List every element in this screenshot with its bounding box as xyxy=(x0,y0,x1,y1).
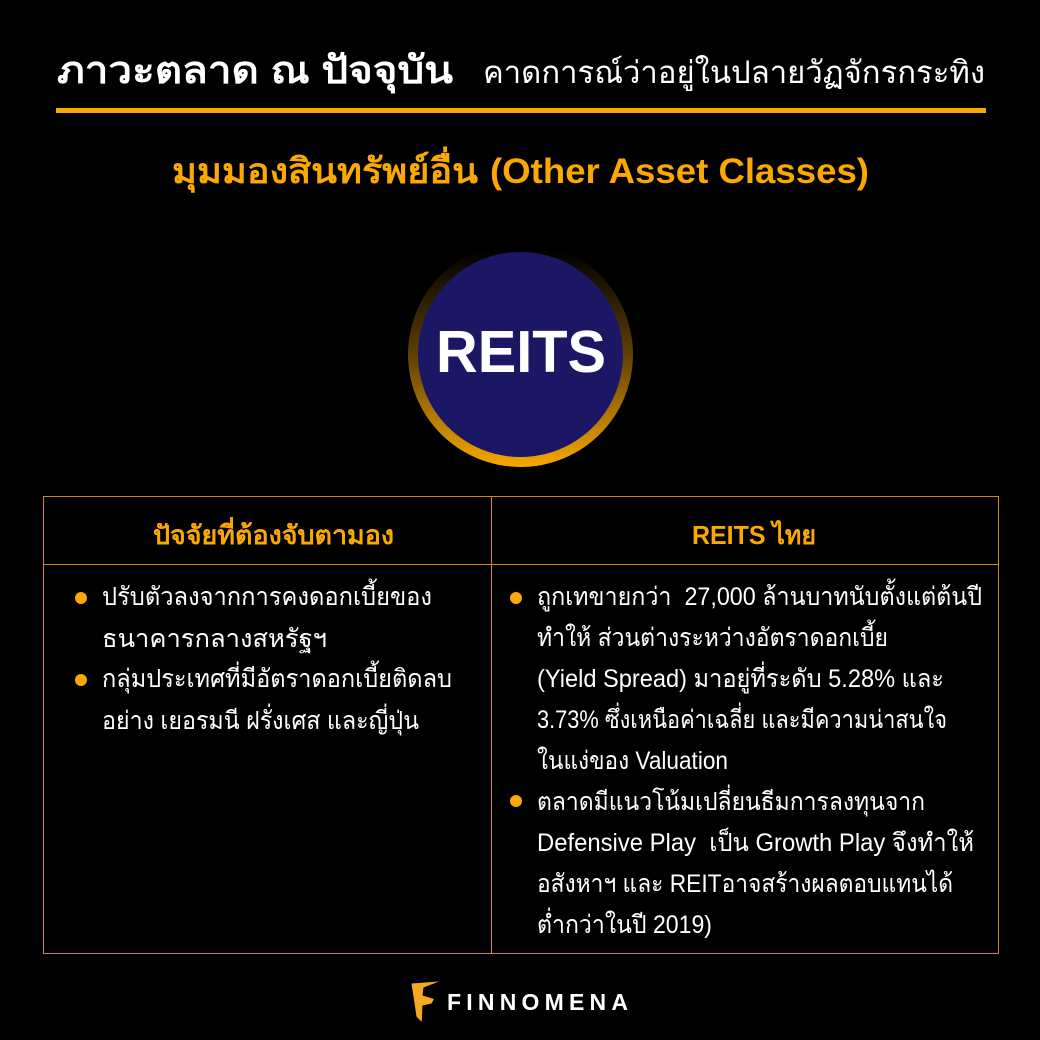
right column bullets: (Yield Spread) มาอยู่ที่ระดับ 5.28% และ xyxy=(537,661,944,694)
right column bullets: 3.73% ซึ่งเหนือค่าเฉลี่ย และมีความน่าสนใจ xyxy=(537,702,947,734)
title: คาดการณ์ว่าอยู่ในปลายวัฏจักรกระทิง xyxy=(483,55,985,91)
right column bullets: Defensive Play เป็น Growth Play จึงทำให้ xyxy=(537,827,974,857)
title: ภาวะตลาด ณ ปัจจุบัน xyxy=(57,50,453,94)
right column bullets: ถูกเทขายกว่า 27,000 ล้านบาทนับตั้งแต่ต้นปี xyxy=(537,578,982,612)
right column bullets: ทำให้ ส่วนต่างระหว่างอัตราดอกเบี้ย xyxy=(537,619,888,652)
left column bullets xyxy=(75,578,452,736)
left column bullets: ปรับตัวลงจากการคงดอกเบี้ยของ xyxy=(102,578,432,611)
REITS circle badge: REITS xyxy=(436,319,606,385)
REITS circle badge xyxy=(408,242,633,467)
title underline xyxy=(56,108,986,113)
left column bullets: อย่าง เยอรมนี ฝรั่งเศส และญี่ปุ่น xyxy=(102,703,419,736)
title xyxy=(57,50,985,94)
right column header: REITS ไทย xyxy=(692,519,816,550)
FINNOMENA logo xyxy=(412,982,628,1022)
subtitle: มุมมองสินทรัพย์อื่น xyxy=(172,146,478,193)
right column bullets xyxy=(510,578,982,939)
left column bullets: ธนาคารกลางสหรัฐฯ xyxy=(102,625,327,653)
subtitle xyxy=(172,146,869,193)
table xyxy=(44,496,998,954)
right column bullets: ในแง่ของ Valuation xyxy=(537,746,728,775)
FINNOMENA logo: FINNOMENA xyxy=(447,989,628,1015)
subtitle: (Other Asset Classes) xyxy=(490,152,869,191)
icon: F mark xyxy=(412,982,439,1022)
right column bullets: ตลาดมีแนวโน้มเปลี่ยนธีมการลงทุนจาก xyxy=(537,784,925,817)
right column bullets: ต่ำกว่าในปี 2019) xyxy=(537,907,712,939)
left column header: ปัจจัยที่ต้องจับตามอง xyxy=(153,516,394,550)
right column bullets: อสังหาฯ และ REITอาจสร้างผลตอบแทนได้ xyxy=(537,869,953,898)
left column bullets: กลุ่มประเทศที่มีอัตราดอกเบี้ยติดลบ xyxy=(102,660,452,694)
